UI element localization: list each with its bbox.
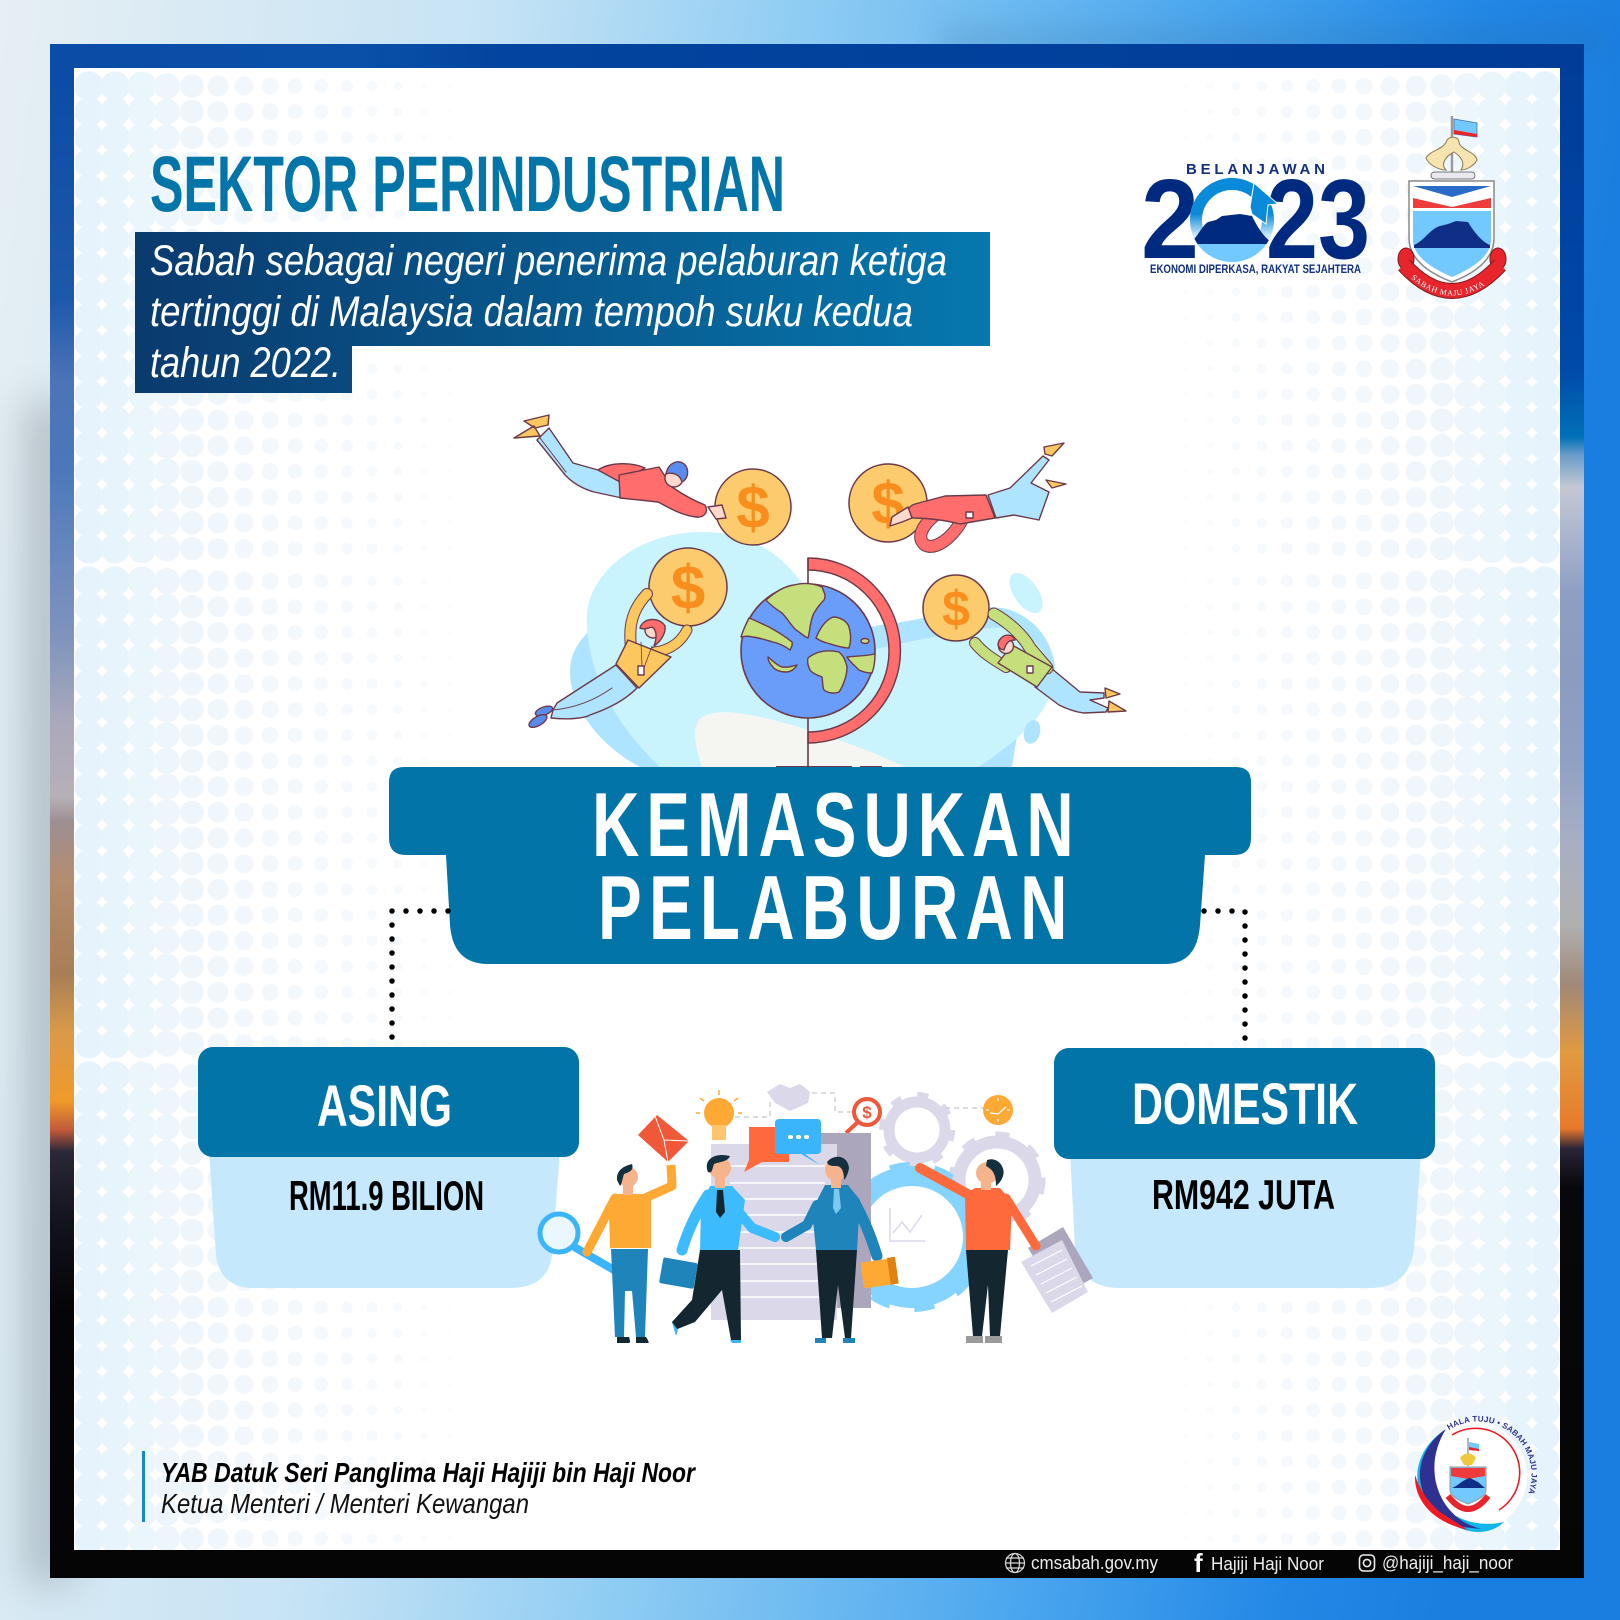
illustration: business people shaking hands xyxy=(540,1084,1093,1343)
coin xyxy=(715,469,791,545)
logo: Belanjawan 2023: 23 xyxy=(1266,156,1370,282)
minister attribution xyxy=(142,1451,697,1522)
speech bubbles xyxy=(744,1119,821,1172)
facebook name: Hajiji Haji Noor xyxy=(1211,1554,1324,1574)
logo: Hala Tuju badge xyxy=(1414,1416,1537,1532)
illustration: people flying with coins around a globe xyxy=(514,415,1126,767)
panel: Asing: RM11.9 BILION xyxy=(289,1172,484,1219)
main banner: Kemasukan Pelaburan xyxy=(389,767,1251,964)
logo: Sabah state crest: SABAH MAJU JAYA xyxy=(1412,275,1484,296)
icon: facebook: f xyxy=(1194,1548,1203,1578)
background blobs xyxy=(570,532,1055,767)
coin: $ xyxy=(736,474,770,541)
coin: $ xyxy=(871,470,905,537)
dotted connector left xyxy=(392,911,448,1040)
title: SEKTOR PERINDUSTRIAN xyxy=(150,139,785,228)
website: cmsabah.gov.my xyxy=(1031,1553,1158,1573)
logo: Hala Tuju badge: HALA TUJU • SABAH MAJU JAYA xyxy=(1446,1416,1537,1494)
main banner: Kemasukan Pelaburan: KEMASUKAN xyxy=(592,773,1074,876)
minister attribution: YAB Datuk Seri Panglima Haji Hajiji bin Haji Noor xyxy=(161,1457,697,1488)
dotted connector right xyxy=(1204,911,1245,1040)
flying person top-left xyxy=(514,415,726,519)
person in orange shirt with papers xyxy=(920,1159,1093,1343)
minister attribution: Ketua Menteri / Menteri Kewangan xyxy=(161,1488,529,1519)
instagram handle: @hajiji_haji_noor xyxy=(1382,1553,1513,1574)
gears xyxy=(841,1095,1042,1308)
subtitle block xyxy=(135,232,990,393)
panel: Asing: ASING xyxy=(317,1074,452,1139)
panel: Asing xyxy=(198,1047,579,1288)
dashed links and small icons: $ xyxy=(862,1103,872,1122)
flying person lower-right xyxy=(975,614,1126,713)
panel: Domestik: RM942 JUTA xyxy=(1152,1171,1335,1218)
icon: globe xyxy=(1006,1554,1024,1572)
logo: Belanjawan 2023: BELANJAWAN xyxy=(1186,161,1325,178)
coin xyxy=(849,464,927,542)
panel: Domestik xyxy=(1054,1048,1435,1288)
logo: Belanjawan 2023: EKONOMI DIPERKASA, RAKYAT SEJAHTERA xyxy=(1150,264,1361,276)
globe on stand xyxy=(741,558,900,767)
subtitle block: tertinggi di Malaysia dalam tempoh suku kedua xyxy=(150,288,913,336)
icon: instagram xyxy=(1360,1555,1374,1571)
main banner: Kemasukan Pelaburan: PELABURAN xyxy=(598,856,1067,959)
document xyxy=(711,1133,871,1320)
coin xyxy=(923,575,989,641)
person in dark blue shirt xyxy=(786,1157,899,1343)
subtitle block: Sabah sebagai negeri penerima pelaburan ketiga xyxy=(150,237,947,285)
coin xyxy=(649,548,727,626)
logo: Belanjawan 2023: 2 xyxy=(1141,156,1199,282)
logo: Sabah state crest xyxy=(1398,116,1506,299)
coin: $ xyxy=(671,554,705,623)
person with envelope and magnifier xyxy=(540,1115,689,1343)
coin: $ xyxy=(942,581,970,637)
flying person lower-left xyxy=(527,594,687,730)
subtitle block: tahun 2022. xyxy=(150,339,341,387)
dashed links and small icons xyxy=(696,1084,1013,1140)
footer bar social links xyxy=(1006,1548,1513,1578)
flying person top-right xyxy=(890,443,1066,546)
person in light blue shirt xyxy=(659,1155,775,1343)
logo: Belanjawan 2023 xyxy=(1144,164,1367,275)
panel: Domestik: DOMESTIK xyxy=(1132,1072,1358,1137)
